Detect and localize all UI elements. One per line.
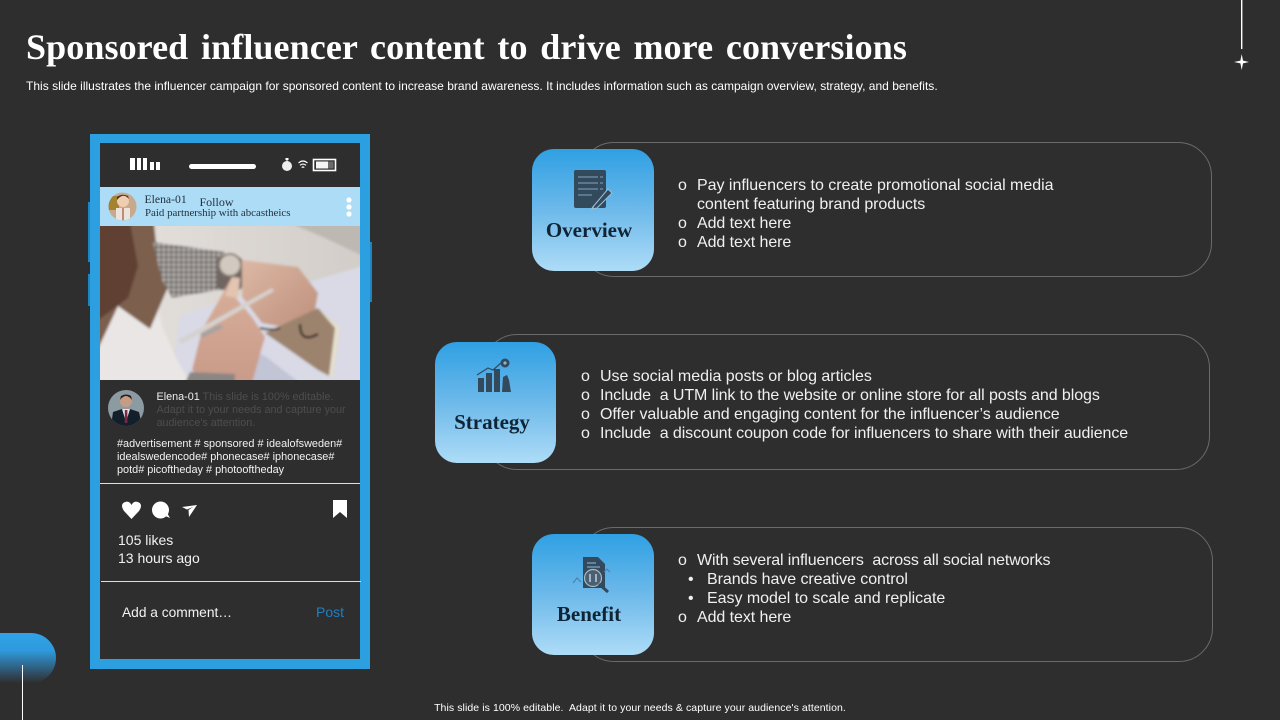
overview list [678, 177, 1054, 251]
label: overview: Overview [546, 218, 632, 242]
panel: strategy: Include a UTM link to the website or online store for all posts and blogs [600, 387, 1100, 404]
panel: benefit: Brands have creative control [707, 571, 908, 588]
divider [100, 483, 360, 484]
likes and time: 13 hours ago [118, 550, 200, 566]
phone frame [90, 134, 370, 669]
title: Sponsored influencer content to drive more conversions [26, 27, 907, 67]
tile: overview [532, 149, 654, 271]
strategy list [581, 368, 1128, 442]
icon: man avatar [108, 390, 144, 426]
panel: benefit: • [688, 590, 694, 607]
profile header bar: Follow [200, 195, 234, 209]
icon: document with magnifier [572, 557, 610, 593]
icon: status bar [130, 158, 336, 172]
panel: benefit: With several influencers across all social networks [697, 552, 1050, 569]
panel: overview: content featuring brand products [697, 196, 925, 213]
decoration: top right star line [1234, 0, 1249, 70]
panel: overview: Add text here [697, 234, 791, 251]
hashtags: idealswedencode# phonecase# iphonecase# [117, 451, 334, 463]
profile header bar [100, 187, 360, 226]
panel: strategy: Use social media posts or blog articles [600, 368, 872, 385]
tile: benefit [532, 534, 654, 655]
footer note: This slide is 100% editable. Adapt it to your needs & capture your audience's attention. [434, 702, 846, 714]
panel: overview: Pay influencers to create promotional social media [697, 177, 1054, 194]
panel: strategy: o [581, 368, 590, 385]
phone screen [100, 143, 360, 659]
profile header bar: Paid partnership with abcastheics [145, 207, 290, 219]
comment text: Elena-01 This slide is 100% editable. [156, 391, 333, 403]
pill outline [580, 527, 1213, 662]
panel: benefit: Easy model to scale and replicate [707, 590, 945, 607]
icon: three dots [346, 197, 352, 217]
pill outline [483, 334, 1210, 470]
panel: overview: o [678, 234, 687, 251]
panel: overview: o [678, 177, 687, 194]
add a comment: Add a comment… [122, 605, 232, 620]
comment block: audience's attention. [156, 417, 255, 429]
panel: overview: o [678, 215, 687, 232]
panel: benefit [532, 527, 1213, 662]
pill outline [580, 142, 1212, 277]
icon: action icons [122, 500, 347, 519]
panel: overview: Add text here [697, 215, 791, 232]
decoration: bottom left gradient tab [0, 633, 56, 683]
post link: Post [316, 604, 344, 620]
panel: phone mockup [88, 134, 372, 669]
likes and time: 105 likes [118, 532, 173, 548]
panel: strategy: Include a discount coupon code for influencers to share with their audience [600, 425, 1128, 442]
hashtags: potd# picoftheday # photooftheday [117, 464, 284, 476]
icon: avatar [108, 192, 136, 220]
profile text: Elena-01 [144, 193, 187, 206]
hashtags [117, 438, 342, 476]
panel: benefit: o [678, 552, 687, 569]
hashtags: #advertisement # sponsored # idealofsweden# [117, 438, 342, 450]
panel: benefit: • [688, 571, 694, 588]
panel: strategy: o [581, 406, 590, 423]
divider [101, 581, 361, 582]
comment block [108, 390, 346, 476]
label: strategy: Strategy [454, 410, 530, 434]
panel: strategy: o [581, 425, 590, 442]
icon: growth chart [476, 358, 511, 392]
subtitle: This slide illustrates the influencer campaign for sponsored content to increase brand awareness. It includes information such as campaign overview, strategy, and benefits. [26, 79, 938, 93]
photo: hands with watch and pen [100, 226, 360, 380]
panel: strategy: o [581, 387, 590, 404]
phone side buttons [88, 202, 372, 306]
label: benefit: Benefit [557, 602, 621, 626]
comment block: Adapt it to your needs and capture your [156, 404, 346, 416]
benefit list [678, 552, 1050, 626]
panel: strategy: Offer valuable and engaging content for the influencer’s audience [600, 406, 1060, 423]
decoration: bottom left line [22, 665, 23, 720]
panel: overview [532, 142, 1212, 277]
panel: strategy [435, 334, 1210, 470]
icon: notepad and pencil [574, 170, 612, 210]
tile: strategy [435, 342, 556, 463]
panel: benefit: o [678, 609, 687, 626]
likes and time [118, 532, 200, 566]
panel: benefit: Add text here [697, 609, 791, 626]
